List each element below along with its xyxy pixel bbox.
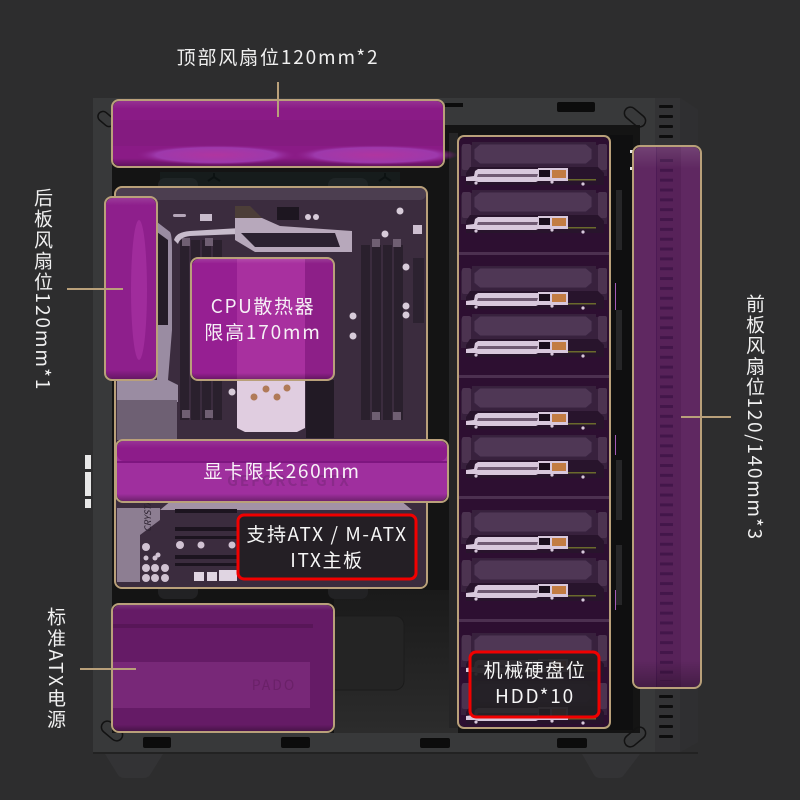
rear shroud lower — [117, 400, 177, 440]
cpu height text: 限高170mm — [204, 318, 322, 345]
hdd tray 8 — [461, 558, 607, 602]
hdd line 2: HDD*10 — [495, 682, 575, 709]
interior right column — [610, 135, 633, 730]
callout line 1: 支持ATX / M-ATX — [246, 520, 408, 547]
gpu zone — [116, 440, 448, 502]
crystal label: CRYSTA — [141, 500, 154, 532]
front leader line — [681, 416, 731, 418]
white cable strip — [174, 228, 240, 244]
fan header — [200, 214, 212, 221]
hdd tray 9 — [461, 633, 607, 677]
hdd line 1: 机械硬盘位 — [483, 656, 587, 683]
board standoffs — [142, 541, 236, 582]
mount holes — [96, 105, 648, 749]
gpu shadow — [160, 500, 412, 510]
rear fan bay — [105, 197, 157, 380]
rear leader line — [67, 288, 123, 290]
motherboard panel — [115, 187, 427, 588]
hdd tray 4 — [461, 314, 607, 358]
top fan label: 顶部风扇位120mm*2 — [177, 43, 379, 70]
vrm fins — [306, 380, 334, 438]
interior glow — [160, 172, 400, 188]
rgb chip — [413, 225, 422, 234]
io shroud slots — [157, 232, 168, 325]
right foot — [582, 754, 640, 778]
memory slots right — [361, 245, 403, 420]
top fan bay — [112, 100, 458, 167]
right column struts — [616, 190, 622, 605]
hdd tray 6 — [461, 435, 607, 479]
small connector — [173, 214, 186, 217]
front fan label: 前板风扇位120/140mm*3 — [742, 294, 769, 541]
hdd tray 5 — [461, 386, 607, 430]
power connector — [277, 207, 299, 220]
crystal panel — [117, 508, 160, 582]
hdd tray 3 — [461, 266, 607, 310]
hdd tray 1 — [461, 142, 607, 186]
cable cut-outs — [158, 178, 368, 599]
copper pipes — [250, 384, 290, 400]
rear fan label: 后板风扇位120mm*1 — [30, 188, 57, 391]
white marks — [85, 150, 633, 508]
cpu cooler zone — [191, 258, 334, 380]
memory clips — [182, 238, 401, 420]
cpu text: CPU散热器 — [211, 292, 315, 319]
front vents top — [659, 105, 673, 148]
psu leader line — [80, 668, 136, 670]
shroud panel — [328, 616, 404, 690]
psu ghost logo: PADO — [252, 675, 296, 695]
fan bay vent marks — [660, 159, 674, 681]
psu label: 标准ATX电源 — [43, 607, 70, 731]
hdd tray 10 — [461, 681, 607, 725]
left foot — [105, 754, 163, 778]
case chassis — [85, 98, 698, 778]
cpu cooler base — [237, 380, 305, 432]
hdd tray 2 — [461, 190, 607, 234]
io shroud — [117, 222, 178, 420]
case interior — [112, 125, 640, 733]
callout line 2: ITX主板 — [290, 546, 364, 573]
heatsink top — [235, 206, 262, 218]
left rail — [449, 133, 458, 728]
pcie slots — [175, 509, 237, 566]
pin header — [413, 258, 424, 323]
lower bay — [334, 590, 458, 733]
memory slots left — [180, 240, 222, 420]
standoffs — [228, 208, 410, 396]
fan glow — [131, 220, 147, 360]
gpu text: 显卡限长260mm — [203, 457, 361, 484]
fan glow — [294, 145, 458, 165]
hdd callout — [470, 652, 599, 717]
fan glow — [136, 145, 296, 165]
top leader line — [277, 82, 279, 117]
motherboard callout — [238, 515, 416, 579]
gpu ghost logo: GEFORCE GTX — [227, 470, 351, 491]
psu bay — [112, 604, 334, 732]
hdd tray 7 — [461, 510, 607, 554]
right column lights — [615, 283, 616, 610]
tie marks — [208, 173, 391, 181]
vrm heatsink — [235, 216, 352, 252]
tray separators — [459, 252, 609, 622]
frame slots — [143, 102, 595, 748]
front vents bottom — [659, 690, 673, 740]
headers — [194, 570, 237, 581]
hdd bay — [458, 136, 610, 728]
front fan bay — [633, 146, 701, 688]
